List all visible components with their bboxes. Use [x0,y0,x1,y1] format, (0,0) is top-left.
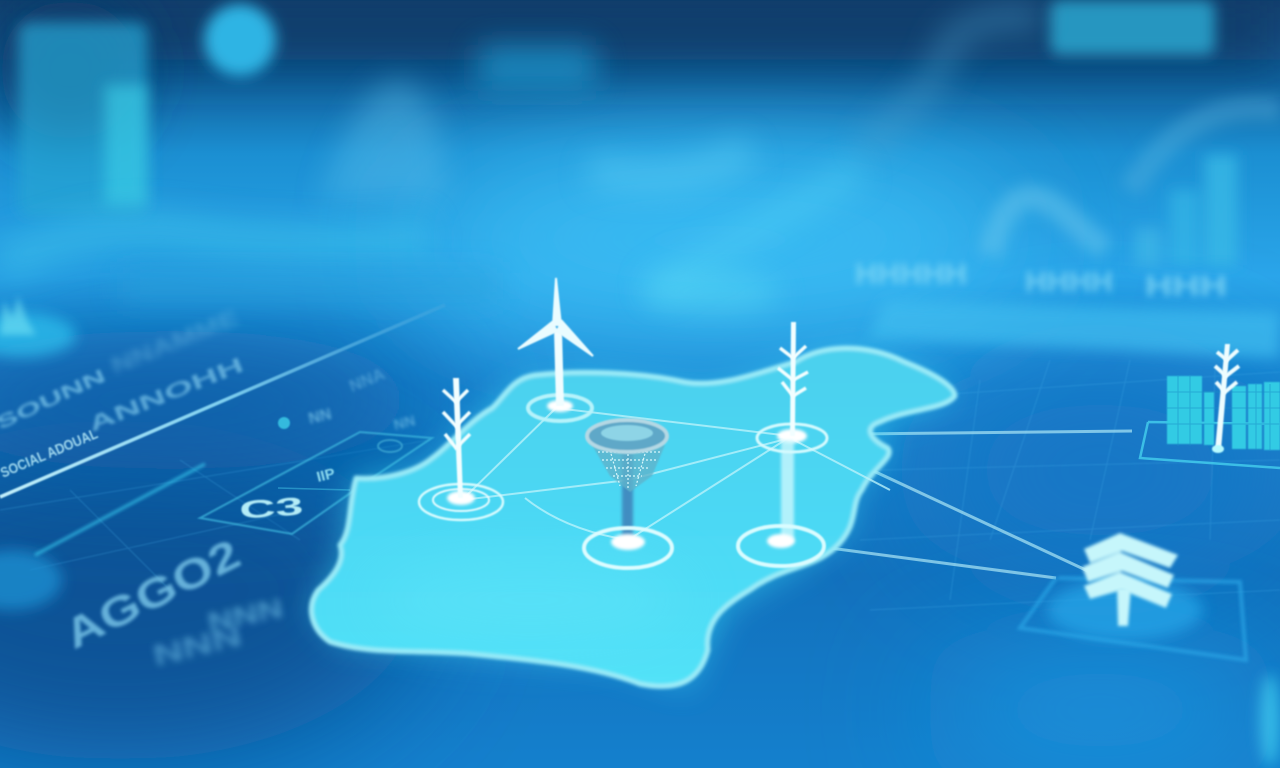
map landmass [311,348,955,686]
basket top [601,425,653,441]
panel: blurred tablet [18,22,148,217]
glow [1047,580,1203,640]
blurred labels, upper right: HHHH [1025,266,1113,299]
blurred glow band left [0,229,430,265]
rings [738,526,824,566]
icon: blurred bars [0,296,36,335]
frame [1020,578,1246,660]
grid lines [0,360,1280,610]
blurred text rows: SOCIAL ADOUAL [0,425,100,482]
mast [790,322,796,436]
left side panel [0,296,445,673]
blurred labels, upper right [855,258,1227,303]
glow: lower left dial [0,550,62,610]
stem [1117,588,1131,626]
basket mesh [598,450,660,490]
diagonal rule [0,305,445,497]
label: cell text 2: IIP [315,465,337,486]
marker: lower right [738,440,824,566]
glow: left edge dial [0,313,76,357]
panel: blurred tag [478,45,596,91]
basket [592,445,665,492]
chevrons [1082,533,1178,608]
base glow [611,534,645,550]
bottom right glow [1260,674,1280,766]
map glow [308,346,958,690]
blurred text rows [0,305,417,482]
marker: left turbine [419,378,503,520]
ring [378,440,402,452]
small blurred labels: NNN [205,593,286,638]
small blurred label 2: NNN [150,620,245,673]
marker: top turbine [518,278,593,421]
mast [554,330,564,406]
map [308,346,958,690]
blurred labels, upper right: HHHHH [855,258,967,291]
mast [453,378,463,498]
blurred band [120,272,500,300]
blurred text rows: NNA [346,364,388,396]
map highlights [370,560,690,640]
blurred labels, upper right: HHH [1145,270,1227,303]
network links outside map [830,431,1132,578]
basket rim [587,420,667,452]
icon: blurred bar in tablet [105,85,147,205]
marker: right turbine [757,322,827,452]
large blurred label: AGGO2 [57,530,247,658]
panel: blurred top right block [1050,0,1215,55]
panel: blurred plate upper right [868,300,1280,358]
dot [278,417,290,429]
marker: centre basket [584,420,672,568]
base glow [1212,445,1224,453]
rings [528,395,592,421]
blurred text rows: ANNOHH [85,354,247,437]
bars [1167,376,1280,450]
branches [443,390,470,448]
blurred text rows: NN [307,406,333,428]
blurred text rows: NNAMME [108,305,242,379]
branches [1215,350,1239,392]
panel: right bar chart [1140,344,1280,468]
base rings [584,528,672,568]
panel: lower right arrow icon [1020,533,1246,660]
rings [419,484,503,520]
blurred centre streak [650,170,860,290]
panel: outlined grid cells [200,432,432,534]
blurred wave top right [860,18,1040,150]
frame [1140,422,1280,468]
blades [518,278,593,356]
cell divider [278,488,350,490]
blurred dashboard panels, top background [0,0,1215,312]
network links on map [462,408,890,540]
icon: blurred circle [204,4,276,76]
branches [778,346,808,396]
turbine [1215,344,1230,450]
blurred text rows: NN [392,412,417,434]
blurred centre shape [590,150,750,177]
blurred arch left [320,79,445,200]
accent streak [35,464,205,555]
mast [781,440,794,540]
chart: blurred bars, upper right [990,108,1280,266]
pole [622,450,633,540]
label: cell text: C3 [238,493,304,525]
bar lines [1167,376,1280,450]
upper rings [757,424,827,452]
